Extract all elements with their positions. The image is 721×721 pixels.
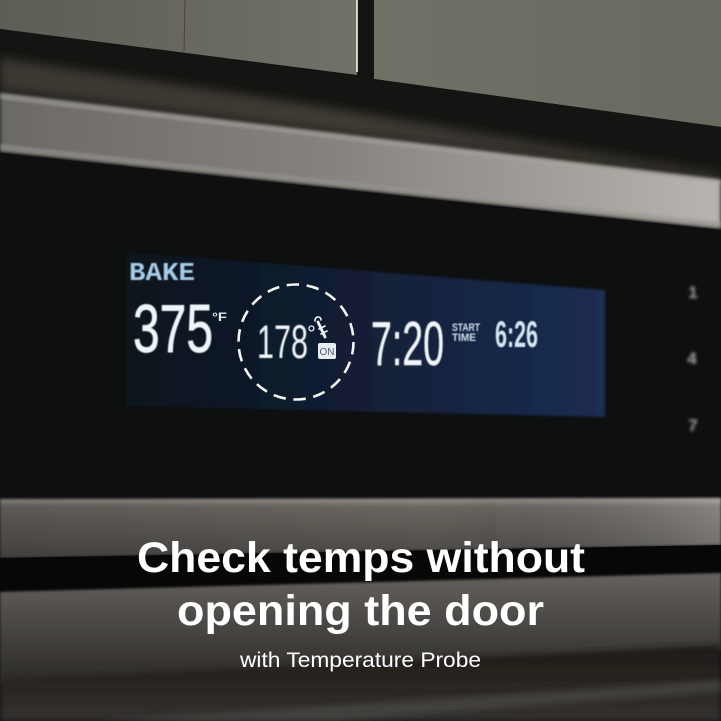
start time label: START [452,322,480,334]
dark door gap [0,545,721,592]
LCD screen [126,252,605,417]
start time label [452,322,480,344]
oven temperature: 375: 375 [133,291,213,367]
side keypad numbers: 4 [687,349,697,368]
side keypad numbers: 7 [688,416,698,435]
stainless trim strip [0,93,721,228]
ribbed lower door [0,645,721,721]
oven door handle band [0,573,721,684]
clock: 7:20: 7:20 [371,310,444,379]
display glass panel [0,153,721,499]
lower door rail [0,498,721,558]
start time value: 6:26: 6:26 [495,314,538,355]
upper cabinet panel: left [0,0,358,75]
probe ON badge [318,343,336,359]
dashed highlight circle [238,284,354,400]
subheading: with Temperature Probe [239,649,481,672]
probe ON badge: ON [320,347,334,358]
upper cabinet panel: right [374,0,721,127]
unit: degrees F: °F [212,310,227,324]
dark recess between cabinet and trim [0,0,721,185]
mode label: BAKE: BAKE [129,258,195,288]
side keypad numbers [687,283,698,435]
headline: opening the door [177,587,544,635]
probe temperature: 178: 178 [257,315,308,368]
start time label: TIME [452,332,476,344]
headline: Check temps without [137,534,585,582]
icon: temperature probe [315,317,327,337]
probe degree sign: ° [307,321,316,346]
side keypad numbers: 1 [688,283,698,302]
headline [137,534,585,635]
